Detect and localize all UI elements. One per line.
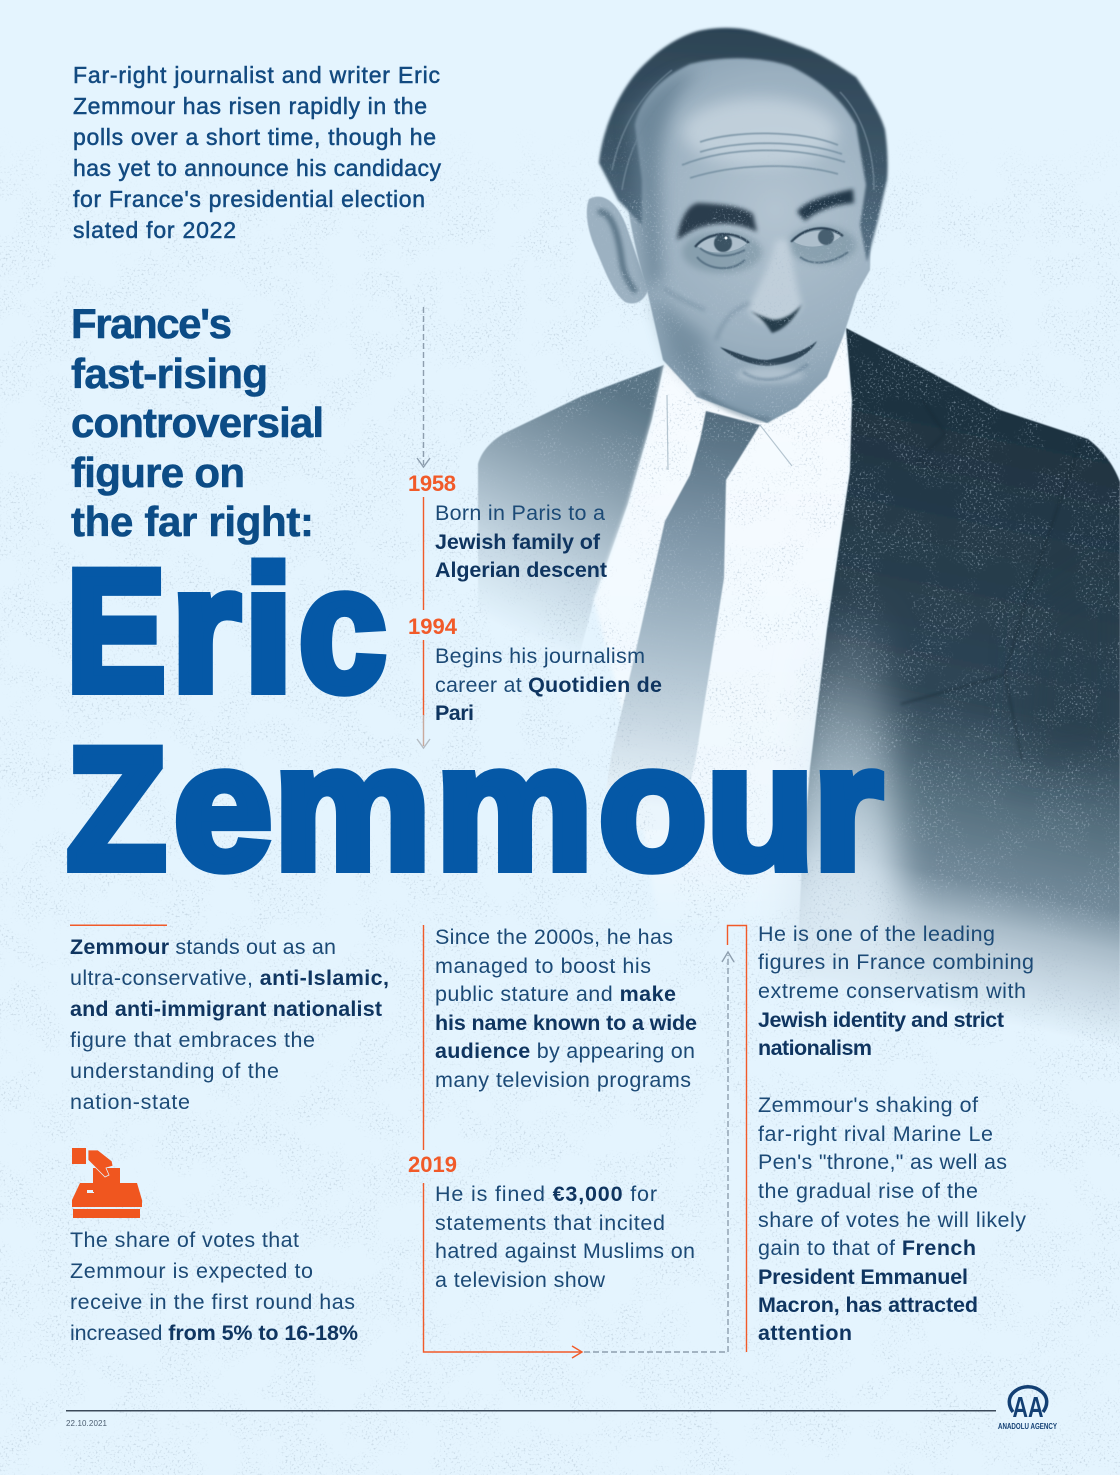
title: Eric: E <box>66 535 166 727</box>
text block: Marine Le Pen <box>758 1093 1026 1345</box>
text block: vote share: receive in the first round has <box>70 1290 355 1314</box>
heading: France's <box>71 300 232 347</box>
text block: since the 2000s: many television programs <box>435 1068 691 1092</box>
heading: fast-rising <box>71 350 268 397</box>
text block: leading figures: figures in France combining <box>758 950 1034 974</box>
title: Zemmour: e <box>174 710 272 906</box>
timeline 1958: Algerian descent <box>435 558 607 582</box>
title: Zemmour: o <box>599 710 707 906</box>
timeline 1994: Pari <box>435 701 474 725</box>
forehead highlight <box>682 98 838 166</box>
icon: ballot box <box>72 1148 142 1218</box>
title: Zemmour: m <box>436 710 592 906</box>
text block: since the 2000s: Since the 2000s, he has <box>435 925 673 949</box>
intro text: Far-right journalist and writer Eric <box>73 62 440 88</box>
sleeve shade <box>1020 560 1120 770</box>
text block: vote share: Zemmour is expected to <box>70 1259 313 1283</box>
eyebrows <box>677 203 757 240</box>
title: Zemmour: Z <box>67 713 166 905</box>
text block: Marine Le Pen: attention <box>758 1321 852 1345</box>
collar crease <box>667 395 792 470</box>
text block: ultra-conservative: nation-state <box>70 1090 190 1114</box>
portrait: Eric Zemmour <box>478 28 1120 1100</box>
eye sockets <box>682 231 762 273</box>
date: 22.10.2021 <box>66 1419 108 1428</box>
lapel and pocket seams <box>901 400 1080 760</box>
intro text: has yet to announce his candidacy <box>73 155 442 181</box>
timeline 1994: Begins his journalism <box>435 644 645 668</box>
timeline 2019 <box>408 1152 695 1292</box>
text block: Marine Le Pen: Pen's "throne," as well as <box>758 1150 1007 1174</box>
text block: ultra-conservative: figure that embraces the <box>70 1028 315 1052</box>
necktie <box>600 411 760 830</box>
text block: leading figures <box>758 922 1034 1060</box>
intro text <box>73 62 442 243</box>
title: Eric: i <box>244 532 293 728</box>
timeline 1958: 1958 <box>408 471 456 496</box>
timeline 2019: hatred against Muslims on <box>435 1239 695 1263</box>
text block: ultra-conservative: understanding of the <box>70 1059 279 1083</box>
title: Zemmour: u <box>707 710 814 906</box>
hair <box>599 28 888 262</box>
timeline 2019: 2019 <box>408 1152 457 1177</box>
text block: Marine Le Pen: Macron, has attracted <box>758 1293 978 1317</box>
forehead wrinkles <box>682 133 845 178</box>
intro text: slated for 2022 <box>73 217 236 243</box>
text block: ultra-conservative <box>70 935 389 1114</box>
left jacket <box>478 365 664 690</box>
text block: ultra-conservative: Zemmour stands out as an <box>70 935 336 959</box>
heading <box>71 300 324 545</box>
mouth <box>720 341 817 366</box>
text block: since the 2000s: his name known to a wide <box>435 1011 697 1035</box>
text block: Marine Le Pen: gain to that of French <box>758 1236 976 1260</box>
divider accent <box>70 924 167 926</box>
hair streaks <box>612 70 874 190</box>
timeline 1994 <box>408 614 662 725</box>
text block: Marine Le Pen: President Emmanuel <box>758 1265 968 1289</box>
text block: ultra-conservative: ultra-conservative, anti-Islamic, <box>70 966 389 990</box>
text block: vote share <box>70 1228 358 1345</box>
timeline 2019: statements that incited <box>435 1211 665 1235</box>
title: Eric: r <box>171 532 240 728</box>
text block: since the 2000s <box>435 925 697 1092</box>
eyes <box>697 237 747 252</box>
timeline 2019: He is fined €3,000 for <box>435 1182 657 1206</box>
heading: controversial <box>71 399 324 446</box>
timeline arrows and connectors <box>417 307 746 1358</box>
timeline 2019: a television show <box>435 1268 605 1292</box>
heading: the far right: <box>71 498 314 545</box>
right jacket <box>790 328 1120 1100</box>
text block: vote share: increased from 5% to 16-18% <box>70 1321 358 1345</box>
nose <box>748 240 802 324</box>
timeline 1958: Jewish family of <box>435 530 601 554</box>
cheek shadow <box>652 295 712 398</box>
footer rule <box>66 1410 996 1412</box>
text block: vote share: The share of votes that <box>70 1228 299 1252</box>
jacket inner edge fade <box>780 600 905 980</box>
text block: Marine Le Pen: Zemmour's shaking of <box>758 1093 978 1117</box>
text block: leading figures: Jewish identity and strict <box>758 1008 1004 1032</box>
timeline 1994: 1994 <box>408 614 458 639</box>
intro text: for France's presidential election <box>73 186 425 212</box>
title: Zemmour: m <box>274 710 430 906</box>
text block: since the 2000s: public stature and make <box>435 982 676 1006</box>
logo: Anadolu Agency: AA <box>1012 1392 1044 1424</box>
ear <box>587 197 648 304</box>
shirt <box>594 335 852 930</box>
heading: figure on <box>71 449 245 496</box>
title: Eric: c <box>299 532 386 728</box>
title: Zemmour: r <box>813 710 882 906</box>
intro text: polls over a short time, though he <box>73 124 436 150</box>
head <box>624 49 872 423</box>
text block: Marine Le Pen: far-right rival Marine Le <box>758 1122 993 1146</box>
text block: leading figures: He is one of the leading <box>758 922 995 946</box>
text block: leading figures: extreme conservatism with <box>758 979 1026 1003</box>
text block: leading figures: nationalism <box>758 1036 872 1060</box>
temple shading <box>630 70 700 290</box>
timeline 1958: Born in Paris to a <box>435 501 605 525</box>
logo: Anadolu Agency: ANADOLU AGENCY <box>998 1421 1057 1431</box>
text block: ultra-conservative: and anti-immigrant nationalist <box>70 997 382 1021</box>
text block: Marine Le Pen: share of votes he will likely <box>758 1208 1026 1232</box>
intro text: Zemmour has risen rapidly in the <box>73 93 427 119</box>
text block: Marine Le Pen: the gradual rise of the <box>758 1179 978 1203</box>
logo: Anadolu Agency <box>998 1387 1057 1431</box>
text block: since the 2000s: audience by appearing on <box>435 1039 695 1063</box>
timeline 1994: career at Quotidien de <box>435 673 662 697</box>
timeline 1958 <box>408 471 607 582</box>
text block: since the 2000s: managed to boost his <box>435 954 651 978</box>
